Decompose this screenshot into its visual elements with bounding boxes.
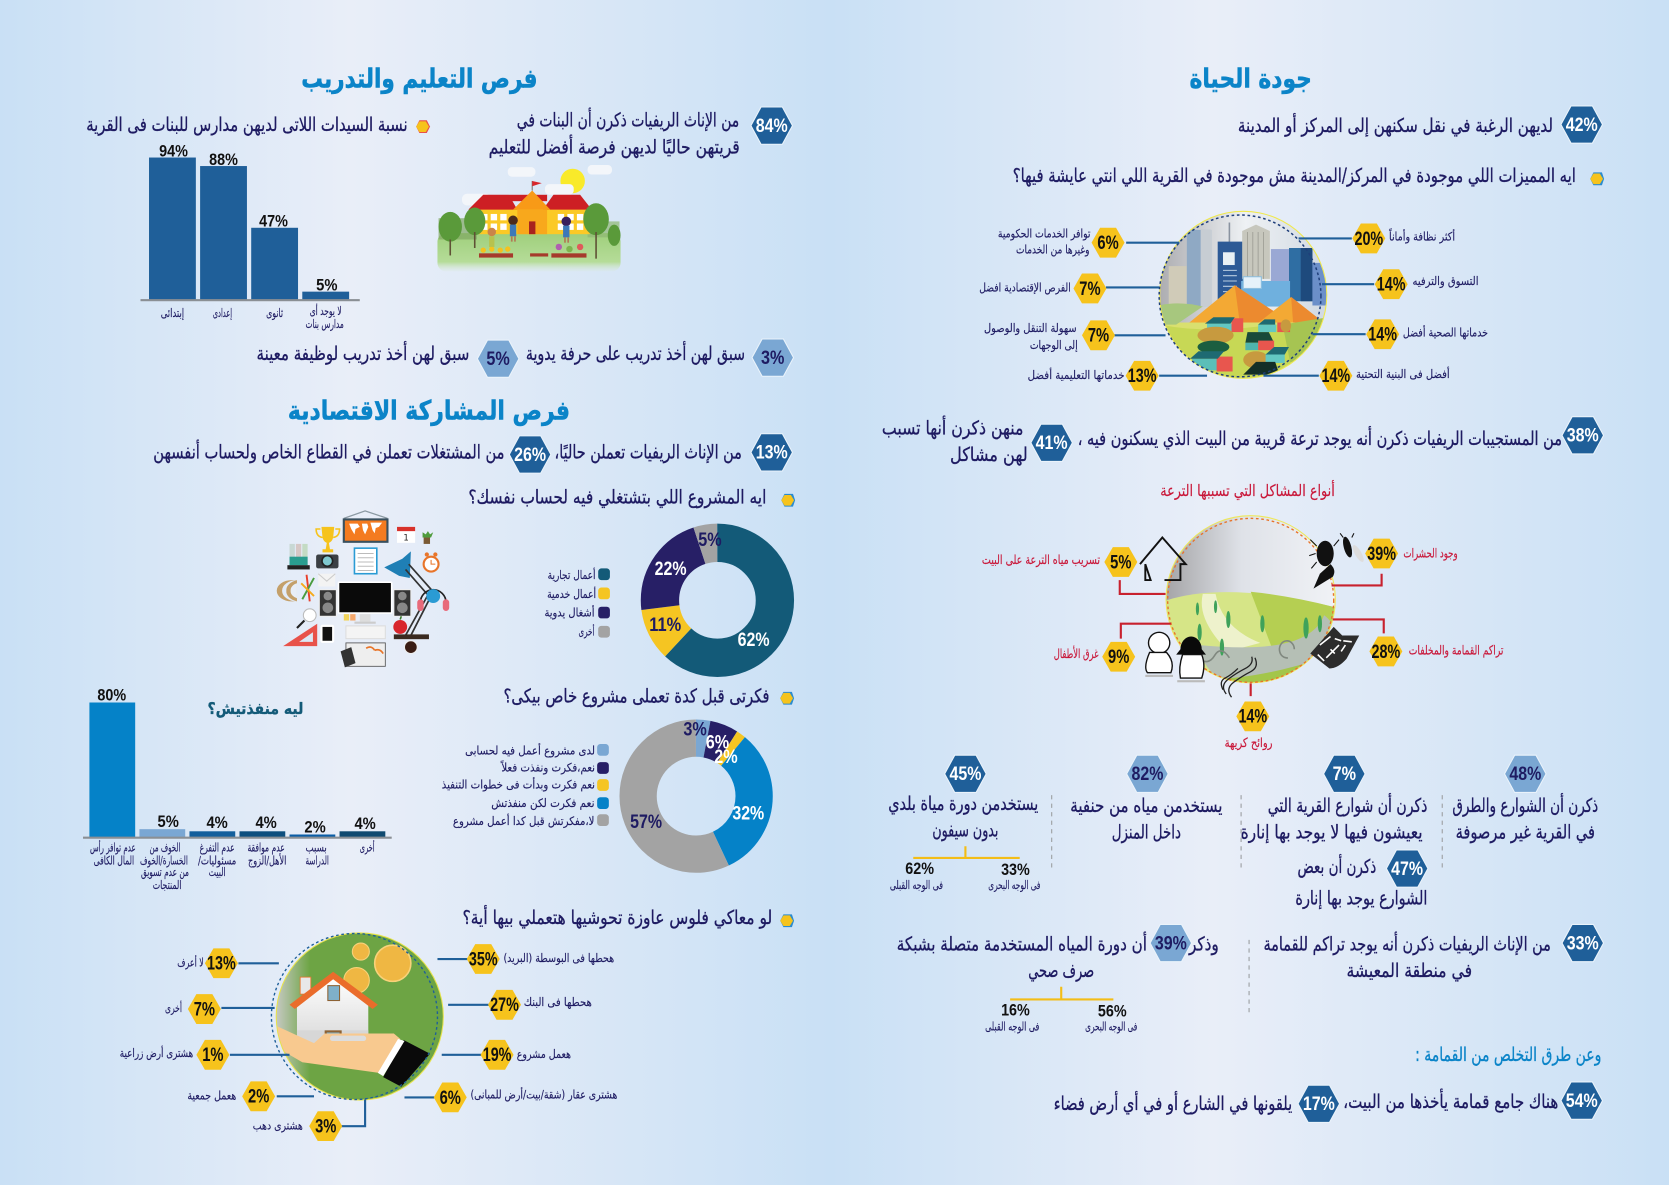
hexagon 27% bank: 27% — [490, 995, 519, 1016]
icon: coffee — [404, 641, 417, 654]
text: it causes problems — [882, 415, 1028, 466]
stat column: no lighting — [1241, 755, 1427, 845]
legend: project types: أخرى — [579, 623, 594, 639]
bar chart: reasons: مسئوليات/ — [198, 853, 236, 868]
stat hexagon 13%: 13% — [756, 443, 788, 464]
heading: economic participation: فرص المشاركة الاقتصادية — [288, 395, 570, 426]
donut labels: 5% — [698, 530, 722, 551]
text: it causes problems: لهن مشاكل — [950, 443, 1028, 466]
text: sanitation connection: وذكر — [1188, 933, 1219, 956]
bracket: upper and lower Egypt 39% — [985, 987, 1137, 1034]
bracket: upper and lower Egypt 45%: فى الوجه القبلى — [890, 878, 943, 893]
hexagon 5% leakage — [982, 547, 1137, 577]
stat hexagon 38%: 38% — [1567, 426, 1599, 447]
bullet — [780, 692, 794, 705]
stat column: unpaved roads — [1452, 755, 1598, 844]
stat column: local toilet: يستخدمن دورة مياة بلدي — [888, 792, 1038, 815]
text: sanitation connection: أن دورة المياه المستخدمة متصلة بشبكة — [897, 932, 1147, 956]
bar chart: girls schools: ثانوى — [266, 306, 283, 321]
bar chart: reasons: الدراسة — [305, 853, 329, 868]
hexagon 14% infrastructure: 14% — [1321, 366, 1350, 387]
bar chart: reasons: البيت — [209, 865, 226, 879]
stat column: no lighting: 7% — [1333, 764, 1356, 785]
legend: project ideas: نعم،فكرت ونفذت فعلاً — [500, 760, 595, 776]
money options left and right — [120, 944, 617, 1141]
legend: project ideas: لا،مفكرتش قبل كدا أعمل مشروع — [453, 813, 594, 829]
bullet — [1590, 172, 1604, 185]
text: rural women say girls have better chance: من الإناث الريفيات ذكرن أن البنات في — [517, 108, 739, 132]
stat hexagon 3% — [752, 339, 794, 376]
hexagon 9% drowning: غرق الأطفال — [1054, 645, 1099, 662]
hexagon 20%: أكثر نظافة وأماناً — [1389, 228, 1455, 245]
stat column: no lighting: يعيشون فيها لا يوجد بها إنارة — [1241, 821, 1423, 845]
hexagon 13% education: خدماتها التعليمية أفضل — [1028, 367, 1125, 382]
heading: quality of life: جودة الحياة — [1189, 63, 1312, 94]
hexagon 28% waste: 28% — [1371, 642, 1400, 663]
donut chart: project types — [660, 543, 775, 658]
bar chart: reasons: 80% — [97, 685, 126, 704]
icon: calendar — [397, 527, 415, 544]
illustration: school — [437, 165, 621, 271]
hexagon 39% insects: وجود الحشرات — [1403, 547, 1458, 562]
illustration: house in hand circle — [271, 932, 444, 1101]
donut labels: 32% — [732, 804, 764, 825]
bar chart: reasons: عدم توافر رأس — [90, 840, 136, 856]
bullet — [781, 494, 795, 507]
stat: some lighting: 47% — [1391, 859, 1423, 880]
stat column: unpaved roads: في القرية غير مرصوفة — [1456, 821, 1595, 844]
panel: economic participation — [83, 395, 795, 1141]
stat column: local toilet — [888, 755, 1038, 842]
icon: map — [343, 511, 389, 543]
stat hexagon 54% — [1561, 1082, 1602, 1119]
bar chart: reasons: المال الكافى — [94, 853, 134, 867]
legend: project ideas: لدى مشروع أعمل فيه لحسابى — [465, 743, 595, 759]
icon: computer monitor — [338, 582, 392, 624]
hexagon 6% government: وغيرها من الخدمات — [1016, 242, 1089, 257]
bracket: upper and lower Egypt 45% — [890, 846, 1040, 893]
text: workers in private sector: من المشتغلات تعملن في القطاع الخاص ولحساب أنفسهن — [153, 440, 505, 464]
hexagon 14% health — [1366, 319, 1488, 349]
icon: phone — [320, 625, 334, 643]
text: sanitation connection — [897, 932, 1219, 982]
hexagon 28% waste: تراكم القمامة والمخلفات — [1409, 644, 1504, 659]
bar chart: girls schools: 5% — [316, 276, 337, 295]
stat column: no lighting: ذكرن أن شوارع القرية التي — [1268, 793, 1427, 817]
question: own project: ايه المشروع اللي بتشتغلي فيه لحساب نفسك؟ — [468, 485, 766, 508]
stat hexagon 26% — [509, 436, 551, 473]
icon: notebook with glasses — [341, 643, 385, 667]
hexagon 7% economy: 7% — [1079, 279, 1101, 300]
legend: project types: أعمال تجارية — [548, 567, 596, 583]
illustration: city and village circle — [1158, 210, 1328, 379]
heading: why not: ليه منفذتيش؟ — [208, 699, 303, 718]
icon: trophy — [316, 527, 340, 552]
hexagon 1% farm land: هشترى أرض زراعية — [120, 1045, 193, 1061]
bar chart: reasons: 5% — [158, 812, 179, 831]
stat hexagon 39%: 39% — [1155, 933, 1187, 954]
donut chart: project ideas — [638, 738, 754, 854]
hexagon 7% other: 7% — [194, 999, 215, 1020]
stat hexagon 41%: 41% — [1036, 433, 1068, 454]
text: waste accumulation: من الإناث الريفيات ذكرن أنه يوجد تراكم للقمامة — [1263, 932, 1551, 956]
icon: children — [1145, 632, 1206, 682]
donut labels: 57% — [630, 812, 662, 833]
hexagon 35% post office: هحطها فى البوسطة (البريد) — [503, 951, 614, 966]
bar chart: reasons: بسبب — [305, 841, 327, 855]
hexagon 7% other — [165, 994, 221, 1024]
bar chart: girls schools: 88% — [209, 150, 238, 169]
icon: magnifier — [297, 609, 316, 628]
hexagon 35% post office — [467, 944, 614, 974]
legend: project types — [544, 567, 610, 639]
bullet — [416, 120, 430, 133]
hexagon 2% savings group: 2% — [248, 1087, 269, 1108]
bracket: upper and lower Egypt 45%: 33% — [1001, 860, 1030, 879]
text: share of women with girls schools: نسبة السيدات اللاتى لديهن مدارس للبنات فى القرية — [86, 113, 408, 136]
text: rural women work currently: من الإناث الريفيات تعملن حاليًا، — [555, 441, 742, 464]
hexagon 27% bank: هحطها فى البنك — [524, 995, 592, 1009]
icon: speakers — [319, 590, 411, 616]
text: waste accumulation: في منطقة المعيشة — [1346, 959, 1472, 982]
hexagon 3% gold — [253, 1111, 342, 1141]
donut labels: 2% — [714, 747, 738, 768]
text: dumping in street: يلقونها في الشارع أو في أي أرض فضاء — [1054, 1091, 1292, 1115]
icon: keyboard — [346, 626, 385, 639]
icon: insects — [1309, 533, 1366, 589]
bracket: upper and lower Egypt 39%: 56% — [1098, 1002, 1127, 1021]
bar chart: reasons: عدم موافقة — [247, 841, 285, 856]
hexagon 1% farm land — [120, 1040, 229, 1070]
text: desire to move: لديهن الرغبة في نقل سكنهن إلى المركز أو المدينة — [1238, 113, 1553, 138]
stat hexagon 33% — [1562, 924, 1604, 962]
hexagon 7% economy — [979, 274, 1106, 303]
hexagon 14% smell — [1225, 701, 1273, 751]
bar chart: reasons: من عدم تسويق — [141, 865, 189, 880]
bar chart: reasons: 4% — [206, 813, 228, 832]
hexagon 7% other: أخرى — [165, 1000, 182, 1016]
hexagon 13% do not know — [177, 948, 238, 978]
question: saving money: لو معاكي فلوس عاوزة تحوشيها هتعملي بيها أية؟ — [462, 905, 772, 929]
stat hexagon 39% — [1150, 924, 1192, 962]
donut labels — [630, 720, 764, 833]
hexagon 2% savings group — [187, 1081, 275, 1111]
hexagon 14% shopping: التسوق والترفيه — [1412, 274, 1478, 289]
hexagon 27% bank — [488, 990, 592, 1020]
hexagon 28% waste — [1369, 637, 1504, 666]
icon: drawing tools — [277, 575, 314, 601]
stat: some lighting: ذكرن أن بعض — [1298, 854, 1376, 878]
bar chart: girls schools: 94% — [159, 141, 188, 160]
hexagon 3% gold: هشترى دهب — [253, 1118, 303, 1133]
stat column: tap water: داخل المنزل — [1112, 821, 1181, 844]
stat hexagon 38% — [1562, 417, 1604, 454]
icon: plant — [423, 531, 433, 544]
stat hexagon 33%: 33% — [1567, 933, 1599, 954]
donut labels: 11% — [649, 615, 681, 636]
stat hexagon 3%: 3% — [761, 348, 784, 369]
bar chart: reasons: 2% — [304, 817, 326, 836]
bar chart: reasons — [83, 685, 392, 892]
legend: project types: أشغال يدوية — [544, 604, 594, 620]
hexagon 6% property: هشترى عقار (شقة/بيت/أرض للمبانى) — [470, 1086, 617, 1102]
hexagon 20% — [1352, 224, 1455, 253]
hexagon 19% project: 19% — [483, 1045, 511, 1066]
panel: quality of life — [882, 63, 1604, 1122]
donut labels: 22% — [655, 559, 687, 580]
stat hexagon 17% — [1298, 1085, 1340, 1122]
dashed dividers — [1052, 795, 1442, 1013]
stat hexagon 41% — [1031, 424, 1072, 461]
icon: camera — [316, 555, 338, 568]
hexagon 7% economy: الفرص الإقتصادية افضل — [979, 281, 1071, 296]
text: it causes problems: منهن ذكرن أنها تسبب — [882, 415, 1023, 439]
hexagon 13% do not know: 13% — [207, 954, 236, 975]
hexagon 3% gold: 3% — [315, 1117, 336, 1138]
donut labels: 3% — [683, 720, 707, 741]
hexagon 39% insects: 39% — [1367, 544, 1396, 565]
bar chart: reasons: أخرى — [360, 840, 375, 856]
hexagon 5% leakage: تسريب مياه الترعة على البيت — [982, 553, 1100, 568]
icon: clock — [424, 552, 439, 572]
bar chart: reasons: الأهل/الزوج — [248, 853, 286, 868]
bar chart: reasons: الخسارة/الخوف — [140, 853, 188, 868]
text: garbage collector: هناك جامع قمامة يأخذها من البيت، — [1343, 1088, 1558, 1113]
hexagon 14% health: 14% — [1368, 325, 1397, 346]
hexagon 19% project — [481, 1040, 571, 1070]
bar chart: reasons: عدم التفرغ — [200, 841, 235, 856]
icon: envelope — [318, 574, 335, 586]
stat hexagon 84% — [751, 107, 792, 144]
hexagon 39% insects — [1365, 539, 1458, 568]
bar chart: girls schools: 47% — [259, 212, 288, 231]
text: waste accumulation — [1263, 932, 1551, 982]
bar chart: reasons: 4% — [354, 814, 376, 833]
bar chart: girls schools: مدارس بنات — [305, 317, 344, 332]
hexagon 7% transport: سهولة التنقل والوصول — [984, 321, 1077, 336]
text: sanitation connection: صرف صحي — [1028, 959, 1094, 982]
bar chart: girls schools: إبتدائى — [161, 306, 184, 320]
icon: books — [287, 544, 310, 569]
bracket: upper and lower Egypt 39%: 16% — [1001, 1000, 1030, 1019]
stat column: tap water — [1070, 755, 1222, 844]
hexagon 9% drowning — [1054, 642, 1135, 672]
stat column: local toilet: 45% — [949, 764, 981, 785]
hexagon 9% drowning: 9% — [1108, 647, 1129, 668]
subheading: waste disposal: وعن طرق التخلص من القمامة : — [1415, 1043, 1601, 1066]
hexagon 14% smell: 14% — [1238, 707, 1267, 728]
hexagon 6% property: 6% — [440, 1088, 461, 1109]
icon: waste pile — [1310, 627, 1359, 668]
stat hexagon 17%: 17% — [1303, 1094, 1335, 1115]
hexagon 1% farm land: 1% — [202, 1045, 224, 1066]
stat hexagon 13% — [751, 434, 792, 471]
legend: project ideas — [442, 743, 609, 829]
bullet — [780, 914, 794, 927]
legend: project ideas: نعم فكرت وبدأت فى خطوات التنفيذ — [442, 777, 595, 793]
hexagon 7% transport: 7% — [1088, 326, 1109, 347]
text: rural women say girls have better chance: قريتهن حاليًا لديهن فرصة أفضل للتعليم — [489, 134, 740, 158]
icon: headphones — [417, 589, 449, 611]
bracket: upper and lower Egypt 39%: فى الوجه البحرى — [1085, 1019, 1137, 1034]
bar chart: girls schools: إعدادى — [213, 306, 232, 320]
bracket: upper and lower Egypt 45%: 62% — [905, 859, 934, 878]
hexagon 35% post office: 35% — [469, 949, 498, 970]
legend: project ideas: نعم فكرت لكن منفذتش — [491, 796, 594, 811]
hexagon 13% education: 13% — [1128, 366, 1156, 387]
hexagon 5% leakage: 5% — [1110, 552, 1131, 573]
icon: lamp — [384, 551, 433, 639]
stat column: unpaved roads: ذكرن أن الشوارع والطرق — [1452, 793, 1598, 817]
canal problems options — [982, 539, 1504, 751]
stat column: tap water: 82% — [1131, 764, 1163, 785]
text: handicraft training: سبق لهن أخذ تدريب على حرفة يدوية — [526, 341, 745, 365]
illustration: office items — [277, 511, 449, 667]
hexagon 14% shopping — [1375, 269, 1478, 299]
heading: education: فرص التعليم والتدريب — [301, 63, 538, 94]
hexagon 14% shopping: 14% — [1377, 275, 1406, 296]
hexagon 2% savings group: هعمل جمعية — [187, 1089, 236, 1103]
bar chart: girls schools: لا يوجد أى — [310, 303, 342, 319]
stat hexagon 5%: 5% — [486, 349, 510, 370]
icon: calendar: 1 — [403, 534, 409, 544]
text: job training: سبق لهن أخذ تدريب لوظيفة معينة — [257, 341, 469, 365]
stat hexagon 5% — [477, 340, 519, 377]
panel: education and training — [86, 63, 794, 377]
stat hexagon 26%: 26% — [514, 445, 546, 466]
stat: some lighting — [1295, 850, 1428, 911]
icon: smell smoke — [1221, 657, 1256, 697]
stat column: local toilet: بدون سيفون — [932, 819, 998, 842]
hexagon 20%: 20% — [1354, 229, 1383, 250]
stat: some lighting: الشوارع يوجد بها إنارة — [1295, 887, 1427, 911]
hexagon 14% infrastructure: أفضل فى البنية التحتية — [1356, 366, 1450, 381]
bar chart: reasons: الخوف من — [150, 841, 180, 856]
heading: canal problems: أنواع المشاكل التي تسببها الترعة — [1160, 480, 1335, 501]
illustration: canal circle — [1140, 511, 1366, 698]
hexagon 6% property — [434, 1082, 617, 1112]
hexagon 6% government — [998, 226, 1125, 258]
city features options — [979, 224, 1488, 391]
legend: project types: أعمال خدمية — [547, 586, 596, 601]
hexagon 13% do not know: لا أعرف — [177, 954, 204, 970]
bar chart: girls schools — [141, 141, 360, 332]
hexagon 19% project: هعمل مشروع — [517, 1047, 571, 1062]
hexagon 13% education — [1028, 361, 1159, 391]
donut labels — [649, 530, 770, 651]
hexagon 7% transport: إلى الوجهات — [1030, 338, 1078, 353]
stat hexagon 42%: 42% — [1566, 115, 1598, 136]
icon: red set square — [283, 624, 317, 646]
donut labels: 62% — [738, 630, 770, 651]
hexagon 14% smell: روائح كريهة — [1225, 736, 1273, 751]
icon: notepad — [354, 548, 377, 574]
donut labels: 6% — [706, 732, 729, 753]
stat hexagon 84%: 84% — [756, 116, 788, 137]
stat hexagon 54%: 54% — [1566, 1091, 1598, 1112]
bracket: upper and lower Egypt 39%: فى الوجه القبلى — [985, 1019, 1039, 1034]
question: thought about a project: فكرتى قبل كدة تعملى مشروع خاص بيكى؟ — [503, 685, 770, 708]
bar chart: reasons: المنتجات — [153, 878, 181, 892]
hexagon 6% government: توافر الخدمات الحكومية — [998, 226, 1090, 241]
icon: house outline — [1140, 538, 1186, 580]
bar chart: reasons: 4% — [255, 813, 277, 832]
stat hexagon 42% — [1561, 106, 1602, 143]
text: rural women say girls have better chance — [489, 108, 740, 158]
hexagon 14% health: خدماتها الصحية أفضل — [1403, 324, 1488, 339]
hexagon 6% government: 6% — [1097, 233, 1119, 254]
stat column: tap water: يستخدمن مياه من حنفية — [1070, 794, 1222, 817]
icon: apple — [393, 616, 407, 634]
bracket: upper and lower Egypt 45%: فى الوجه البحرى — [988, 878, 1040, 893]
hexagon 7% transport — [984, 320, 1115, 353]
stat column: unpaved roads: 48% — [1509, 764, 1541, 785]
hexagon 14% infrastructure — [1319, 361, 1450, 391]
